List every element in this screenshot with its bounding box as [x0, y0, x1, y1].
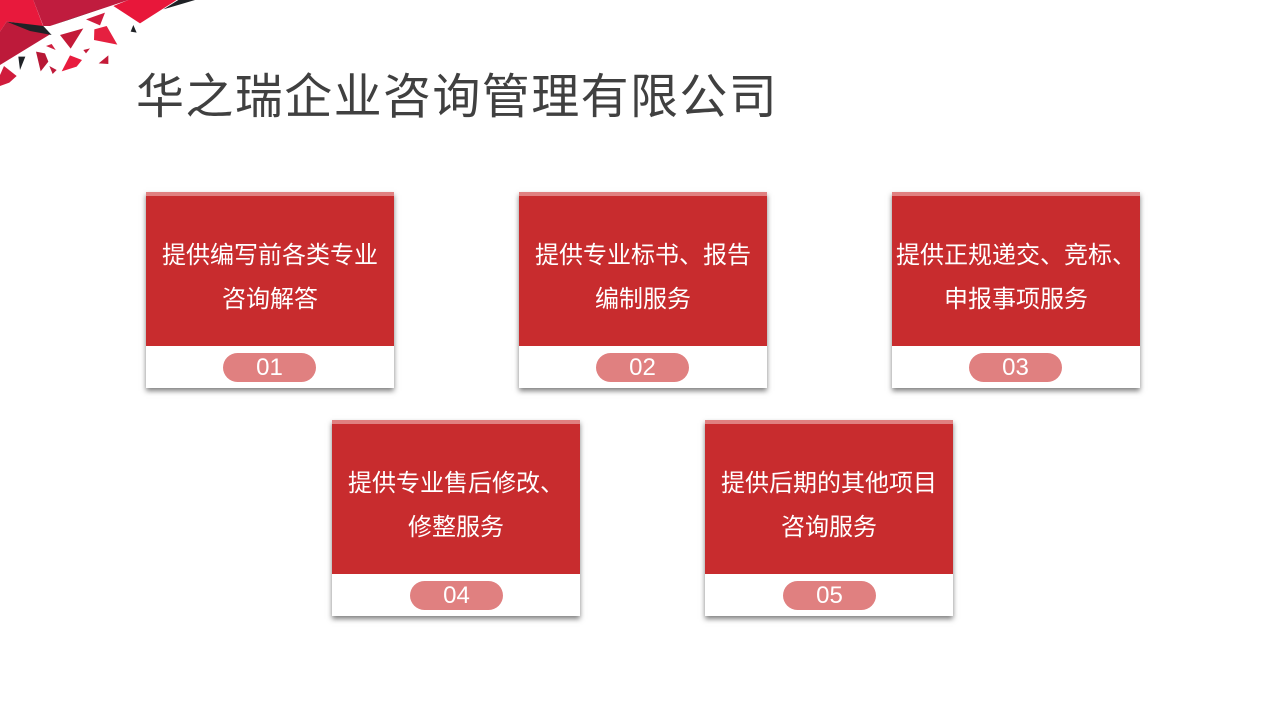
card 03 number badge	[969, 353, 1062, 382]
card 05 number badge	[783, 581, 876, 610]
card 04 number badge	[410, 581, 503, 610]
card 05 number badge: 05	[816, 582, 843, 609]
card 02 text	[535, 242, 751, 313]
card 02 text: 编制服务	[595, 286, 691, 313]
card 01 number badge	[223, 353, 316, 382]
card 02 text: 提供专业标书、报告	[535, 242, 751, 269]
card 05 text: 提供后期的其他项目	[721, 470, 937, 497]
card 03	[892, 192, 1140, 388]
card 01 text: 咨询解答	[222, 286, 318, 313]
card 04 number badge: 04	[443, 582, 470, 609]
card 01 text: 提供编写前各类专业	[162, 242, 378, 269]
card 02 number badge: 02	[629, 354, 656, 381]
card 04 text: 修整服务	[408, 514, 504, 541]
card 04 text	[348, 470, 564, 541]
card 03 text: 申报事项服务	[944, 286, 1088, 313]
card 04 text: 提供专业售后修改、	[348, 470, 564, 497]
card 04	[332, 420, 580, 616]
card 03 number badge: 03	[1002, 354, 1029, 381]
card 05 text	[721, 470, 937, 541]
card 03 text: 提供正规递交、竞标、	[896, 242, 1136, 269]
card 03 text	[896, 242, 1136, 313]
card 02 number badge	[596, 353, 689, 382]
title: 华之瑞企业咨询管理有限公司	[136, 71, 778, 124]
decoration: red low-poly corner	[0, 0, 195, 86]
card 05 text: 咨询服务	[781, 514, 877, 541]
card 01 text	[162, 242, 378, 313]
card 01 number badge: 01	[256, 354, 283, 381]
card 01	[146, 192, 394, 388]
card 05	[705, 420, 953, 616]
card 02	[519, 192, 767, 388]
